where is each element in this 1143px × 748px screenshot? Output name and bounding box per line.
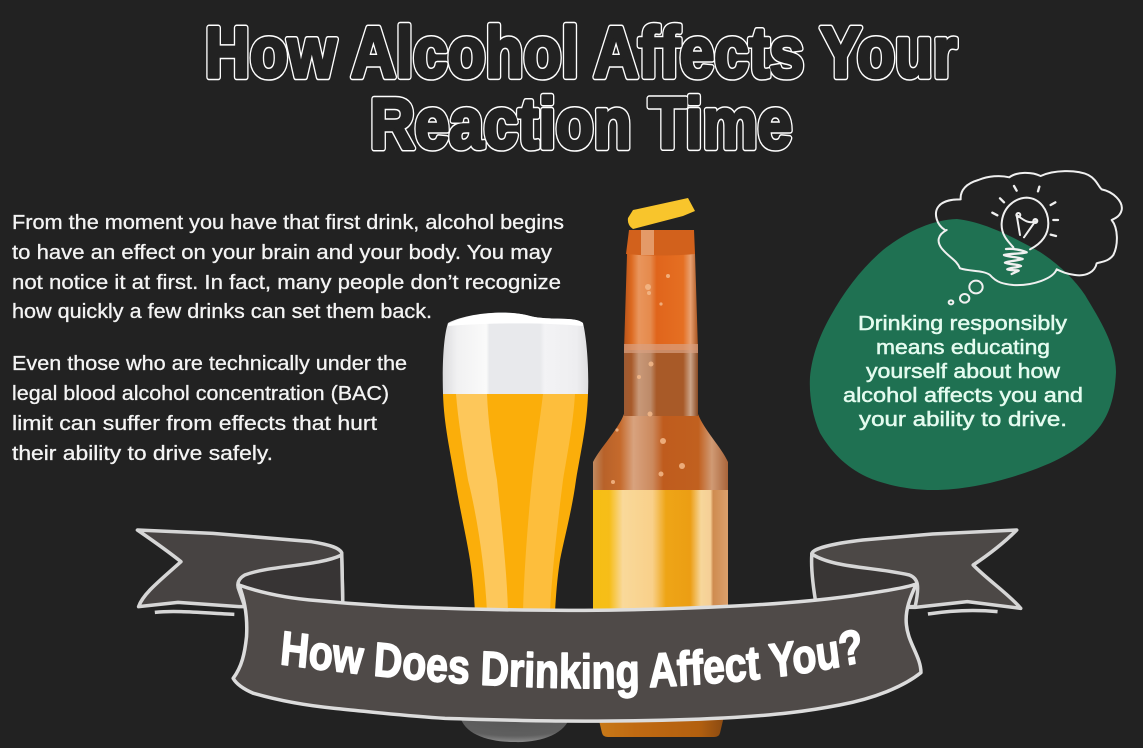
intro text block: to have an effect on your brain and your body. You may: [12, 242, 552, 264]
title: How Alcohol Affects Your: [205, 14, 957, 93]
callout text: Drinking responsibly: [858, 313, 1067, 335]
paragraph 2: Even those who are technically under the: [12, 353, 407, 375]
green callout blob: [810, 219, 1116, 490]
intro text block: limit can suffer from effects that hurt: [12, 413, 378, 435]
ribbon left tail: [137, 530, 343, 614]
intro text block: not notice it at first. In fact, many people don’t recognize: [12, 272, 561, 294]
cloud outline: [936, 171, 1122, 285]
title: How Alcohol Affects Your: [205, 14, 957, 93]
beer bottle: [593, 198, 728, 737]
bottle body and label: [593, 489, 728, 614]
thought cloud with light bulb: [936, 171, 1122, 304]
paragraph 1: From the moment you have that first drink, alcohol begins: [12, 212, 564, 234]
water droplets: [611, 274, 685, 484]
title: Reaction Time: [370, 85, 792, 164]
intro text block: legal blood alcohol concentration (BAC): [12, 383, 389, 405]
bottle cap: [628, 198, 695, 229]
callout text: alcohol affects you and: [843, 385, 1083, 407]
ribbon banner: [136, 528, 1022, 723]
beer: [443, 394, 588, 612]
title: [205, 14, 957, 164]
bottle shoulder: [593, 414, 728, 490]
ribbon right tail: [812, 530, 1021, 614]
bottle lip: [626, 230, 695, 256]
beer glass: [443, 313, 588, 742]
foam: [443, 313, 588, 394]
callout text: yourself about how: [866, 361, 1061, 383]
bulb glass: [1002, 198, 1048, 249]
bulb filament: [1017, 215, 1036, 237]
bulb rays: [992, 186, 1058, 236]
bulb screw: [1004, 249, 1027, 274]
bottle base: [598, 716, 724, 737]
bottle neck: [624, 254, 698, 350]
callout text: your ability to drive.: [859, 409, 1067, 431]
ribbon main band: [233, 584, 921, 721]
glass highlights: [456, 394, 508, 612]
intro text block: [12, 212, 564, 465]
callout text: means educating: [876, 337, 1050, 359]
intro text block: their ability to drive safely.: [12, 443, 273, 465]
callout text: [843, 313, 1083, 431]
thought bubbles: [969, 281, 983, 293]
title: Reaction Time: [370, 85, 792, 164]
glass base: [460, 716, 570, 742]
intro text block: how quickly a few drinks can set them back.: [12, 301, 432, 323]
ribbon text: How Does Drinking Affect You?: [281, 630, 860, 699]
